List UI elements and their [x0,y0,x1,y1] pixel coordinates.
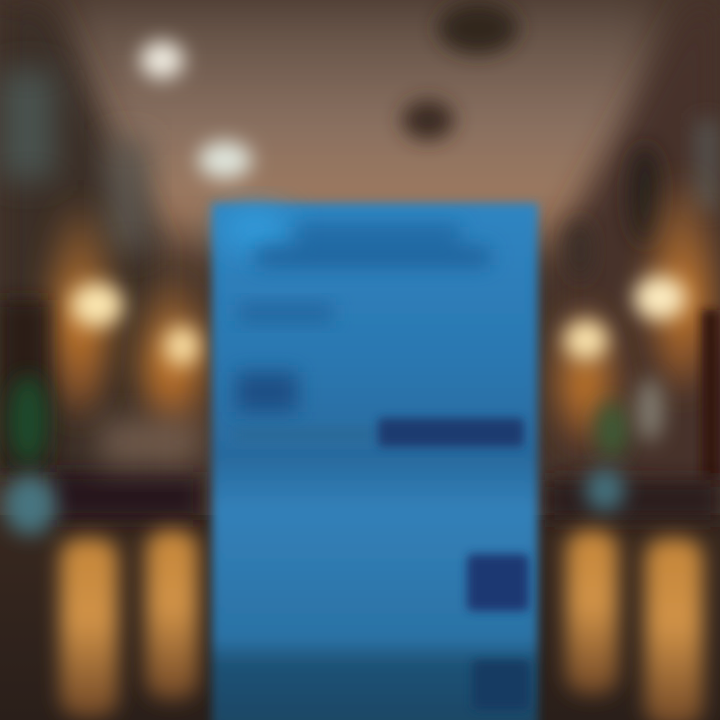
plants and dark planters [0,300,720,480]
poster dark square [467,554,529,611]
poster panel [212,203,538,720]
left wall sconces [52,205,202,435]
poster text band [238,304,333,322]
dark ceiling fixtures [402,2,662,280]
poster dark navy bar [378,418,524,447]
poster small dark block [236,372,298,412]
ceiling lights [140,41,252,179]
poster lower dark square [472,660,530,710]
floor with dark base band [0,420,720,720]
poster subheading band [235,427,375,443]
poster heading [255,226,490,266]
poster bright corner [221,210,289,250]
blue poster [212,203,538,720]
right wall sconces [559,180,710,445]
floor light reflections [60,530,703,720]
